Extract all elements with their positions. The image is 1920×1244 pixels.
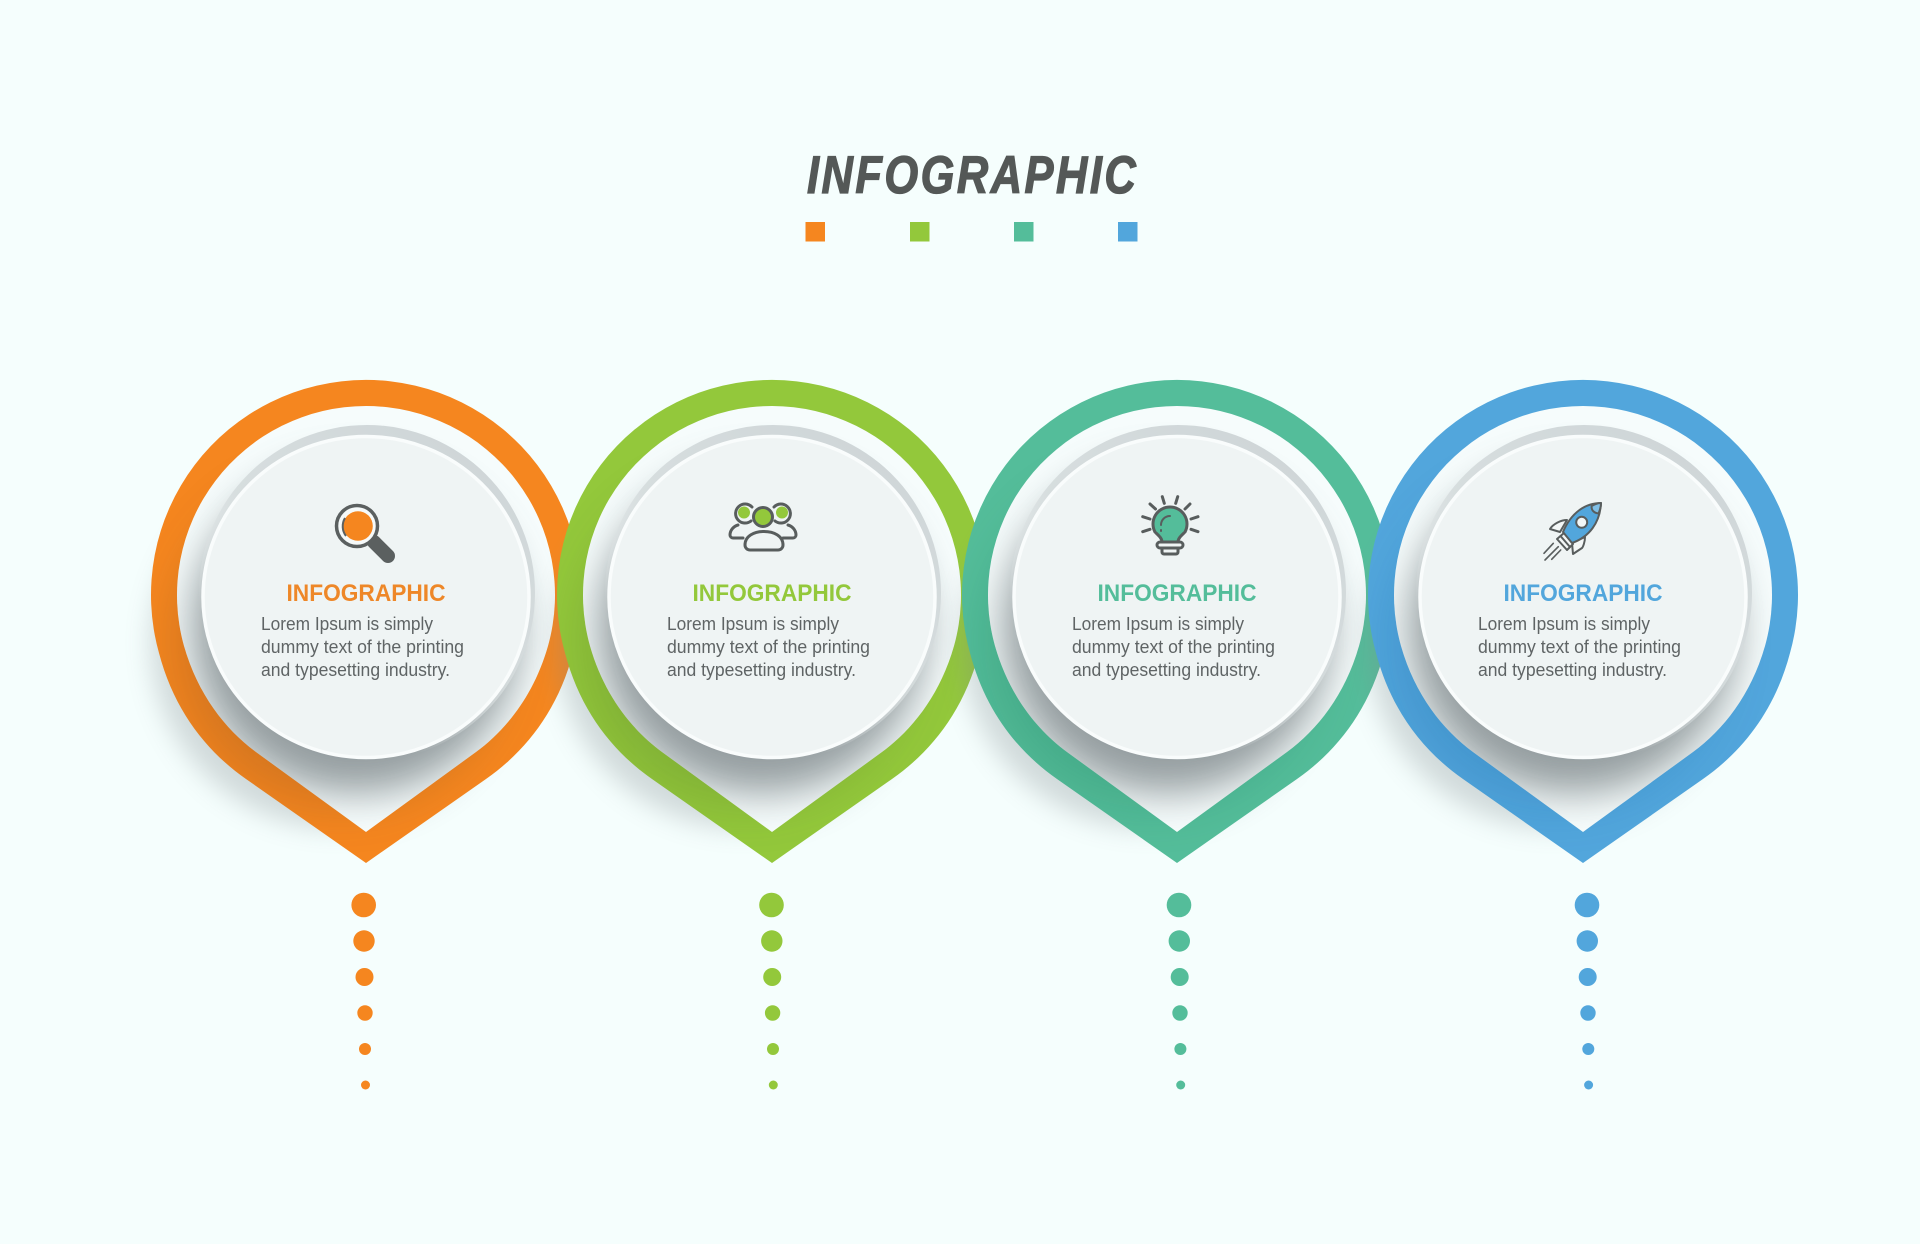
heading: INFOGRAPHIC xyxy=(1098,580,1256,607)
body text: dummy text of the printing xyxy=(1072,637,1275,657)
inner circle xyxy=(605,425,941,761)
body text: and typesetting industry. xyxy=(1072,660,1261,680)
pin shape xyxy=(151,380,581,863)
inner circle xyxy=(1010,425,1346,761)
body text xyxy=(1478,614,1681,680)
inner circle shadow xyxy=(1409,465,1737,793)
pin shape xyxy=(962,380,1392,863)
body text: dummy text of the printing xyxy=(261,637,464,657)
heading: INFOGRAPHIC xyxy=(1504,580,1662,607)
inner circle shadow xyxy=(192,465,520,793)
body text: Lorem Ipsum is simply xyxy=(667,614,839,634)
inner circle xyxy=(199,425,535,761)
dots: step 3 xyxy=(1167,893,1191,1090)
body text: dummy text of the printing xyxy=(1478,637,1681,657)
icon: rocket xyxy=(1544,503,1601,560)
body text: dummy text of the printing xyxy=(667,637,870,657)
pin shape xyxy=(1368,380,1798,863)
panel: step 1 orange pin xyxy=(151,380,581,863)
panel: step 2 green pin xyxy=(557,380,987,863)
body text: and typesetting industry. xyxy=(261,660,450,680)
body text: and typesetting industry. xyxy=(1478,660,1667,680)
icon: light bulb xyxy=(1143,497,1198,554)
dots: step 4 xyxy=(1575,893,1599,1090)
title: INFOGRAPHIC xyxy=(807,146,1138,205)
inner circle shadow xyxy=(1003,465,1331,793)
body text: Lorem Ipsum is simply xyxy=(261,614,433,634)
body text xyxy=(261,614,464,680)
body text: Lorem Ipsum is simply xyxy=(1072,614,1244,634)
icon: magnifying glass xyxy=(336,506,388,556)
icon: team of people xyxy=(730,504,796,550)
body text xyxy=(667,614,870,680)
heading: INFOGRAPHIC xyxy=(692,580,852,607)
panel: step 4 blue pin xyxy=(1368,380,1798,863)
body text: Lorem Ipsum is simply xyxy=(1478,614,1650,634)
heading: INFOGRAPHIC xyxy=(286,580,446,607)
panel: step 3 teal pin xyxy=(962,380,1392,863)
body text: and typesetting industry. xyxy=(667,660,856,680)
dots: step 2 xyxy=(759,893,784,1090)
title colour squares xyxy=(806,222,1138,242)
dots: step 1 xyxy=(351,893,376,1090)
body text xyxy=(1072,614,1275,680)
inner circle xyxy=(1416,425,1752,761)
pin shape xyxy=(557,380,987,863)
inner circle shadow xyxy=(598,465,926,793)
